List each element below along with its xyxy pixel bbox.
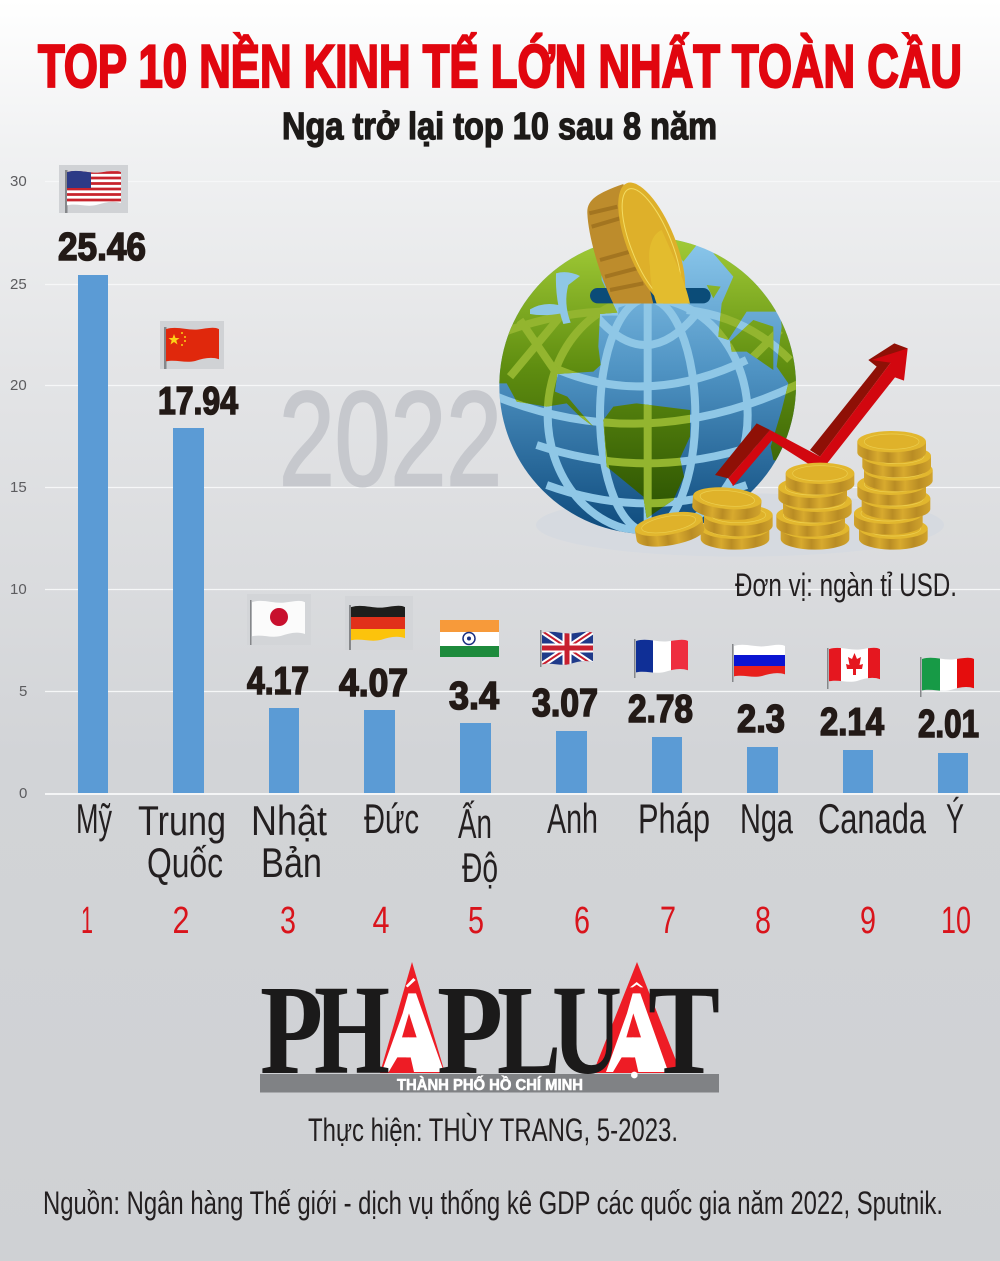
sea inlets — [530, 272, 580, 324]
rank numbers — [81, 900, 971, 942]
flag: Canada — [827, 647, 880, 689]
logo letters: L — [497, 959, 561, 1101]
country labels — [76, 795, 964, 891]
bar: Đức — [364, 710, 395, 793]
country labels: Pháp — [638, 795, 710, 842]
country labels: Độ — [462, 844, 498, 891]
country labels: Mỹ — [76, 795, 112, 842]
bar: Trung Quốc — [173, 428, 204, 793]
logo letters: U — [552, 959, 622, 1101]
bar: Canada — [843, 750, 873, 793]
rising arrow — [715, 343, 908, 486]
country labels: Bản — [261, 839, 322, 886]
country labels: Nga — [740, 795, 793, 842]
illustration: globe piggy bank with coins and rising arrow — [480, 174, 944, 557]
y axis grid and labels: 20 — [10, 377, 27, 394]
rank numbers: 8 — [755, 900, 771, 942]
bar: Anh — [556, 731, 587, 793]
y axis grid and labels: 30 — [10, 173, 27, 190]
big coin — [587, 182, 690, 304]
rank numbers: 1 — [81, 900, 93, 942]
bar: Pháp — [652, 737, 682, 793]
left coin stack — [633, 485, 773, 551]
middle coin stack — [776, 463, 854, 550]
bar: Mỹ — [78, 275, 108, 793]
rank numbers: 9 — [860, 900, 876, 942]
flag: USA — [59, 165, 128, 213]
bar: Ấn Độ — [460, 723, 491, 793]
rank numbers: 6 — [574, 900, 590, 942]
logo tagline: THÀNH PHỐ HỒ CHÍ MINH — [397, 1076, 583, 1094]
country labels: Trung — [138, 797, 226, 844]
bar chart — [78, 275, 968, 793]
bar values: 4.17 — [247, 660, 309, 703]
bar values — [58, 226, 979, 746]
bar values: 3.4 — [449, 675, 499, 718]
flag: India — [440, 620, 499, 657]
right coin stack — [854, 431, 933, 550]
y axis grid and labels: 10 — [10, 581, 27, 598]
country labels: Đức — [364, 795, 419, 842]
rank numbers: 10 — [941, 900, 971, 942]
rank numbers: 7 — [660, 900, 676, 942]
flag: China — [160, 321, 224, 369]
bar values: 25.46 — [58, 226, 146, 269]
flag: Italy — [920, 657, 974, 697]
rank numbers: 4 — [372, 900, 390, 942]
country labels: Canada — [818, 795, 926, 842]
logo white A shapes — [382, 978, 668, 1078]
country labels: Ấn — [458, 800, 492, 847]
bar: Nga — [747, 747, 778, 793]
logo band — [260, 1074, 719, 1092]
flag: UK — [540, 630, 593, 667]
globe — [499, 240, 796, 534]
flag: Russia — [732, 644, 785, 682]
bar values: 2.78 — [628, 688, 693, 731]
subtitle: Nga trở lại top 10 sau 8 năm — [282, 106, 717, 148]
country labels: Nhật — [251, 797, 327, 844]
logo letters: P — [260, 959, 323, 1101]
y axis grid and labels: 5 — [19, 683, 27, 700]
bar: Ý — [938, 753, 968, 793]
bar: Nhật Bản — [269, 708, 299, 793]
shadow — [536, 493, 944, 557]
logo letters: P — [437, 959, 503, 1101]
bar values: 4.07 — [339, 662, 408, 705]
logo letters: H — [314, 959, 390, 1101]
country labels: Anh — [547, 795, 598, 842]
logo red triangles — [380, 962, 681, 1073]
y axis grid and labels: 0 — [19, 785, 27, 802]
credit: Thực hiện: THÙY TRANG, 5-2023. — [308, 1112, 678, 1148]
bar values: 17.94 — [158, 380, 238, 423]
logo letters: T — [648, 959, 720, 1101]
bar values: 3.07 — [532, 682, 598, 725]
bar values: 2.3 — [737, 698, 785, 741]
logo: Pháp Luật TP.HCM — [260, 959, 720, 1101]
y axis grid and labels — [10, 173, 1000, 802]
y axis grid and labels: 15 — [10, 479, 27, 496]
bar values: 2.14 — [820, 701, 884, 744]
bar values: 2.01 — [918, 703, 979, 746]
country labels: Ý — [946, 795, 964, 842]
rank numbers: 5 — [468, 900, 484, 942]
flag: Germany — [349, 605, 405, 650]
rank numbers: 2 — [172, 900, 190, 942]
watermark year 2022: 2022 — [279, 365, 502, 514]
y axis grid and labels: 25 — [10, 276, 27, 293]
flag: France — [634, 639, 688, 678]
logo letters — [260, 959, 720, 1101]
coin slot — [590, 288, 711, 303]
rank numbers: 3 — [280, 900, 296, 942]
flag: Japan — [250, 600, 305, 645]
country labels: Quốc — [147, 839, 223, 886]
